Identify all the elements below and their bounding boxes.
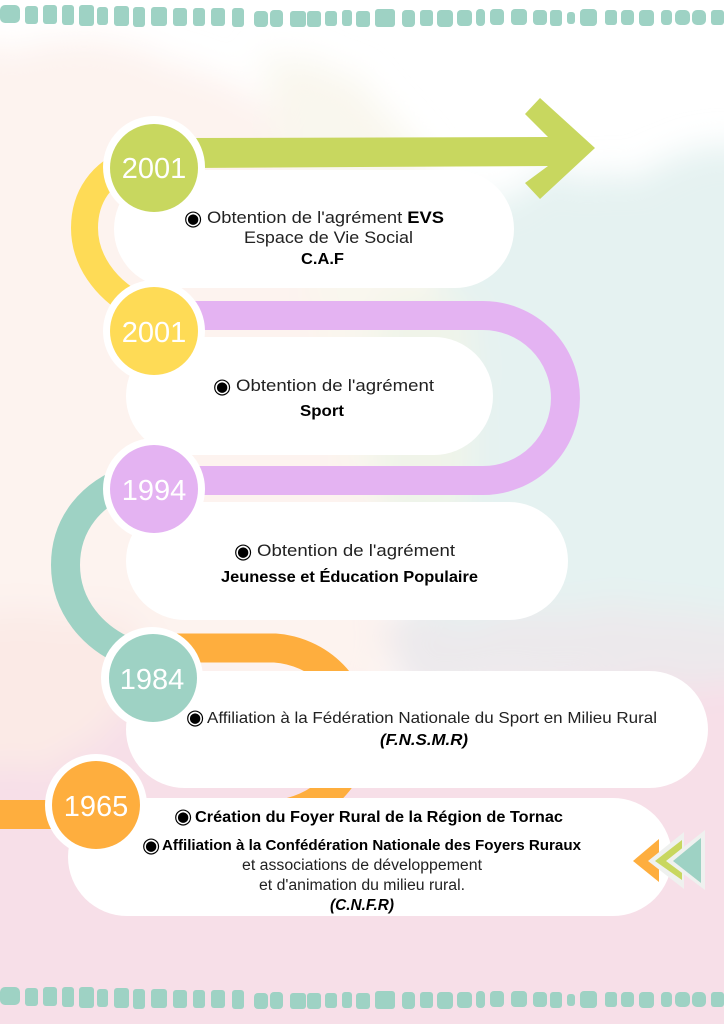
year badge: 2001 yellow: 2001 <box>122 317 186 349</box>
bullet: ◉ <box>186 705 204 729</box>
text: creation: Création du Foyer Rural de la Région de Tornac <box>195 809 563 826</box>
text: C.A.F: C.A.F <box>301 251 344 268</box>
connector: teal arc <box>66 478 135 655</box>
text: affiliation: Affiliation à la Fédération Nationale du Sport en Milieu Rural <box>207 710 657 727</box>
bullet: ◉ <box>213 374 231 398</box>
text: EVS agreement: Obtention de l'agrément EVS <box>207 208 444 227</box>
connector: orange curve <box>0 648 356 814</box>
bullet: ◉ <box>174 804 192 828</box>
text: F.N.S.M.R: (F.N.S.M.R) <box>380 732 468 749</box>
card: 2001 EVS <box>114 170 514 288</box>
text: agreement: Obtention de l'agrément <box>257 541 455 560</box>
card: 2001 Sport <box>126 337 493 455</box>
bottom dashed border <box>0 987 724 1009</box>
year badge: 2001 green: 2001 <box>122 153 186 185</box>
card: 1965 creation <box>68 798 672 916</box>
bullet: ◉ <box>234 539 252 563</box>
year badge: 2001 green <box>103 116 205 218</box>
text: affiliation: Affiliation à la Confédération Nationale des Foyers Ruraux <box>162 837 582 854</box>
card: 1984 affiliation <box>126 671 708 788</box>
connector: yellow arc <box>84 160 135 305</box>
text: agreement: Obtention de l'agrément <box>236 376 434 395</box>
year badge: 1965 orange <box>45 754 147 856</box>
year badge: 1984 teal <box>101 627 203 729</box>
year badge: 1994 purple: 1994 <box>122 475 186 507</box>
arrow: green with chevron head <box>190 98 595 199</box>
icon: triple chevrons <box>633 830 705 890</box>
text: Jeunesse et Éducation Populaire: Jeunesse et Éducation Populaire <box>221 567 478 586</box>
year badge: 1994 purple <box>103 438 205 540</box>
text: Espace de Vie Social: Espace de Vie Social <box>244 228 413 247</box>
text: associations: et associations de développement <box>242 857 483 874</box>
year badge: 2001 yellow <box>103 280 205 382</box>
year badge: 1984 teal: 1984 <box>120 664 184 696</box>
text: C.N.F.R: (C.N.F.R) <box>330 897 394 914</box>
bullet: ◉ <box>142 833 160 857</box>
text: Sport: Sport <box>300 403 345 420</box>
year badge: 1965 orange: 1965 <box>64 791 128 823</box>
top dashed border <box>0 5 724 27</box>
bullet: ◉ <box>184 206 202 230</box>
card: 1994 Jeunesse <box>126 502 568 620</box>
connector: purple loop <box>190 316 565 480</box>
text: animation: et d'animation du milieu rural. <box>259 877 465 894</box>
